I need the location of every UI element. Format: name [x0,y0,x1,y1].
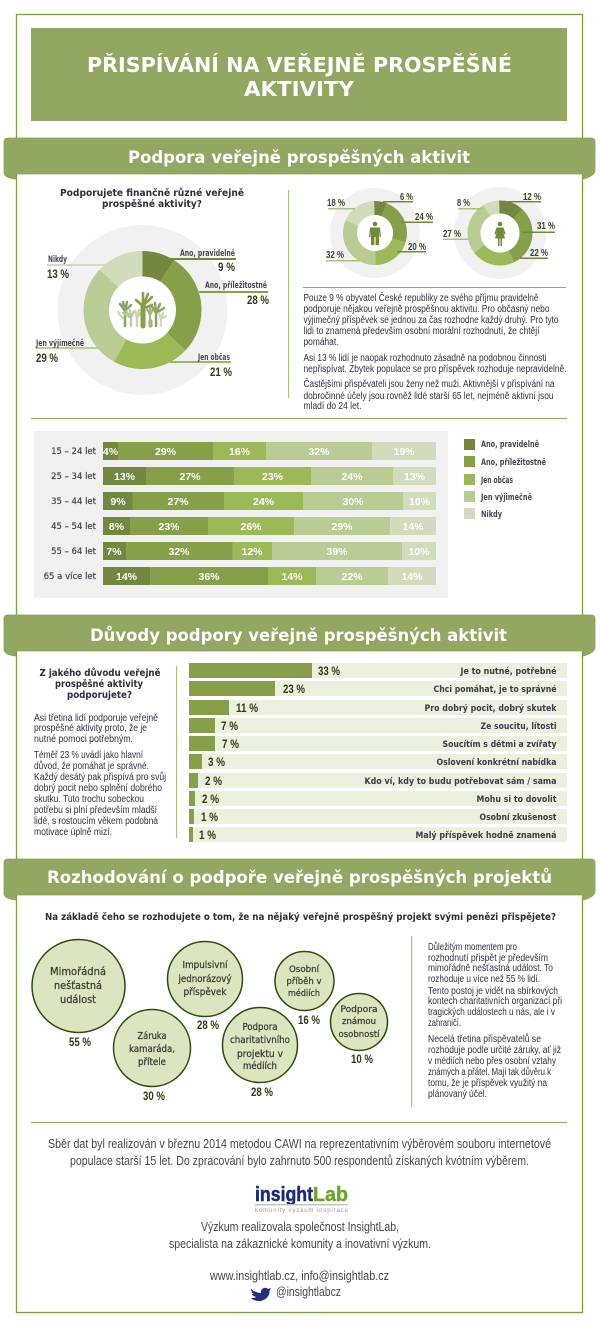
bar chart: reasons: Osobní zkušenost [480,812,557,823]
row 25-34: 25 – 34 let [51,472,97,482]
row 25-34: 24% [341,471,363,483]
footer: company [169,1220,431,1251]
callout: Ano, pravidelně [170,248,236,274]
question: decision: Na základě čeho se rozhodujete o tom, že na nějaký veřejně prospěšný projekt svými penězi přispějete? [45,912,556,923]
labels: women: 22 % [530,247,548,259]
row 65+: 14% [401,571,423,583]
row 25-34: 23% [262,471,284,483]
bubble: Záruka kamaráda, přítele: Záruka [138,1031,166,1042]
bar chart: reasons: Mohu si to dovolit [476,795,557,805]
bar chart: reasons: 2 % [205,774,222,788]
bubble: Podpora charitativního projektu v médiích: charitativního [230,1035,290,1046]
footer: methodology: populace starší 15 let. Do zpracování bylo zahrnuto 500 respondentů získaných kvótním výběrem. [70,1154,529,1168]
footer: company: Výzkum realizovala společnost InsightLab, [201,1220,399,1234]
text block: reasons: důvod, že pomáhat je správné. [34,760,149,772]
row 25-34: 13% [404,471,426,483]
text block: reasons: prospěšné aktivity proto, že je [34,723,147,734]
callout: Jen výjimečně [35,338,98,365]
text block: decision [428,941,562,1100]
row 55-64 [51,542,436,560]
text block: decision: mimořádně nešťastná událost. To [428,963,553,974]
section band: Podpora: Podpora veřejně prospěšných aktivit [128,148,470,168]
bubble: Podpora známou osobností: Podpora [340,1005,378,1015]
text block: support summary [304,291,566,412]
bubble: Podpora známou osobností: osobností [338,1030,380,1040]
bubble: Impulsivní jednorázový příspěvek: 28 % [197,1018,219,1032]
row 45-54: 45 – 54 let [51,522,97,532]
text block: reasons: Asi třetina lidí podporuje veřejně [34,713,158,724]
row 35-44 [51,492,436,510]
bubble: Osobní příběh v médiích: médiích [288,988,320,999]
row 45-54 [51,517,436,535]
text block: support summary: mladí do 24 let. [304,401,362,412]
callout: Ano, pravidelně: 9 % [218,260,235,274]
bar chart: reasons: Oslovení konkrétní nabídka [436,757,556,768]
row 35-44: 27% [167,496,189,508]
question: support: Podporujete finančně různé veřejně [60,188,244,199]
bubble: Osobní příběh v médiích [275,952,334,1027]
legend: Jen občas [480,475,513,486]
bar chart: reasons: Pro dobrý pocit, dobrý skutek [424,704,557,714]
callout: Jen občas: 21 % [210,365,232,379]
text block: reasons: potřebu si plní především mladší [34,805,157,816]
row 55-64: 39% [326,546,348,558]
text block: decision: tomu, že je příspěvek využitý na [428,1078,547,1089]
bar chart: reasons: 7 % [222,737,239,751]
bubble: Impulsivní jednorázový příspěvek: příspěvek [184,987,227,998]
callout: Nikdy: Nikdy [48,255,67,265]
text block: reasons: motivace úplně mizí. [34,827,112,838]
bar chart: reasons: Malý příspěvek hodně znamená [416,830,556,841]
text block: support summary: podporuje nějakou veřejně prospěšnou aktivitu. Pro občasný nebo [304,304,550,315]
row 35-44: 24% [253,496,275,508]
divider lines [31,190,567,419]
logo: insightLab: insight [255,1184,313,1206]
question: support [60,188,244,210]
bar chart: reasons: 23 % [283,682,305,696]
bubble: Impulsivní jednorázový příspěvek: Impulsivní [182,960,228,971]
footer: contact: @insightlabcz [276,1285,341,1299]
text block: decision: Tento postoj je vidět na sbírkových [428,986,558,997]
labels: men: 20 % [408,241,426,253]
labels: women: 8 % [457,197,470,209]
bar chart: reasons: 7 % [221,719,238,733]
text block: support summary: Častějšími přispěvateli jsou ženy než muži. Aktivnější v přispívání na [304,377,555,390]
row 45-54: 26% [240,521,262,533]
logo: insightLab [255,1184,349,1214]
row 25-34: 27% [179,471,201,483]
text block: support summary: Asi 13 % lidí je naopak rozhodnuto zásadně na podobnou činnosti [304,353,546,364]
row 65+: 14% [281,571,303,583]
callout: Jen výjimečně: Jen výjimečně [35,338,84,349]
bar chart: reasons: 1 % [199,828,216,842]
bubble: Osobní příběh v médiích: příběh v [286,977,322,987]
section band: Podpora [4,138,595,179]
text block: decision: tragických událostech u nás, ale i v [428,1007,555,1018]
section band: Rozhodování: Rozhodování o podpoře veřejně prospěšných projektů [47,866,552,888]
bubble: Podpora známou osobností: známou [342,1017,376,1027]
logo: insightLab: Lab [313,1184,348,1206]
text block: support summary: pomáhat. [304,337,338,348]
row 35-44: 30% [342,496,364,508]
logo: insightLab: komunity výzkum inspirace [255,1208,349,1214]
callout: Ano, příležitostně: Ano, příležitostně [205,280,267,291]
text block: decision: Důležitým momentem pro [428,941,517,953]
question: reasons: prospěšné aktivity [55,679,144,690]
row 65+: 36% [198,571,220,583]
divider line [31,1122,567,1123]
row 15-24: 29% [155,446,177,458]
text block: decision: rozhodnutí přispět je především [428,953,548,964]
bar chart: reasons: Je to nutné, potřebné [460,666,556,677]
text block: decision: Necelá třetina přispěvatelů se [428,1033,541,1045]
footer: company: specialista na zákaznické komunity a inovativní výzkum. [169,1237,431,1251]
bar chart: reasons: 2 % [202,792,219,806]
legend: Ano, pravidelně [481,439,539,450]
row 45-54: 14% [402,521,424,533]
bubble: Osobní příběh v médiích: 16 % [298,1013,320,1027]
bar chart: reasons: 3 % [208,755,225,769]
bubble: Impulsivní jednorázový příspěvek: jednorázový [178,974,232,985]
row 35-44: 35 – 44 let [51,497,97,507]
callout: Nikdy: 13 % [47,267,69,281]
callout: Nikdy [47,255,105,281]
divider line [176,666,177,838]
title banner [31,28,567,121]
question: support: prospěšné aktivity? [102,199,202,210]
labels: women: 31 % [537,220,555,232]
text block: reasons: lidé, s rostoucím věkem podobná [34,816,158,827]
row 65+: 14% [116,571,138,583]
row 15-24: 19% [393,446,415,458]
section band: Důvody: Důvody podpory veřejně prospěšných aktivit [90,624,507,646]
bubble: Mimořádná nešťastná událost: událost [60,994,96,1006]
title banner: PŘISPÍVÁNÍ NA VEŘEJNĚ PROSPĚŠNÉ [87,53,512,77]
row 65+: 65 a více let [44,572,97,582]
row 45-54: 8% [109,521,125,533]
bubble: Podpora charitativního projektu v médiích [222,1008,298,1099]
row 45-54: 23% [158,521,180,533]
icon: raised hands [118,293,166,326]
row 35-44: 9% [110,496,126,508]
bubble: Impulsivní jednorázový příspěvek [168,942,242,1032]
legend: Nikdy [481,510,502,520]
bubble: Záruka kamaráda, přítele: kamaráda, [129,1044,175,1055]
question: reasons [40,668,160,701]
bubble: Záruka kamaráda, přítele [114,1010,190,1103]
callout: Jen výjimečně: 29 % [36,351,58,365]
bubble: Mimořádná nešťastná událost [32,940,125,1049]
callout: Jen občas: Jen občas [197,352,230,363]
text block: decision: v médiích nebo přes osobní vztahy [428,1056,556,1067]
labels: men: 24 % [415,211,433,223]
donut chart: overall support [35,225,269,395]
row 15-24: 15 – 24 let [51,447,97,457]
text block: reasons: nutné pomoci potřebným. [34,734,133,745]
legend [464,439,546,520]
bar chart: reasons: Kdo ví, kdy to budu potřebovat sám / sama [364,777,556,787]
icon: woman [494,222,506,246]
row 55-64: 32% [168,546,190,558]
row 55-64: 12% [241,546,263,558]
bubble: Záruka kamaráda, přítele: 30 % [143,1089,165,1103]
bar chart: reasons [189,663,567,842]
text block: decision: známých a přátel. Mají tak důvěru k [428,1066,552,1078]
text block: decision: rozhoduje podle určité záruky, ať již [428,1045,561,1056]
bar chart: reasons: 1 % [201,810,218,824]
text block: support summary: Pouze 9 % obyvatel České republiky ze svého příjmu pravidelně [304,291,539,304]
bubble: Záruka kamaráda, přítele: přítele [138,1057,166,1068]
row 15-24: 4% [103,446,119,458]
question: reasons: Z jakého důvodu veřejně [40,668,160,679]
text block: decision: zahraničí. [428,1018,461,1029]
labels: men [326,191,433,262]
panel: stacked bar chart by age [34,431,448,598]
bar chart: reasons: 33 % [318,664,340,678]
text block: support summary: lidi to znamená především osobní morální rozhodnutí, že chtějí [304,326,540,337]
row 55-64: 55 – 64 let [51,547,97,557]
row 15-24: 16% [229,446,251,458]
bar chart: reasons: Ze soucitu, lítosti [480,722,556,732]
divider line [411,936,412,1107]
labels: women: 12 % [523,191,541,203]
title banner: AKTIVITY [244,77,355,101]
bar chart: reasons: 11 % [236,701,258,715]
row 15-24: 32% [308,446,330,458]
labels: women [443,191,555,259]
bubble: Podpora charitativního projektu v médiích: projektu v [237,1049,283,1060]
text block: reasons: Téměř 23 % uvádí jako hlavní [34,750,143,761]
labels: men: 32 % [326,249,344,261]
row 25-34 [51,467,436,485]
text block: reasons: dobrý pocit nebo splnění dobrého [34,783,162,794]
question: reasons: podporujete? [67,690,132,701]
callout: Ano, pravidelně: Ano, pravidelně [180,248,235,259]
section band: Rozhodování [4,859,595,900]
text block: decision: plánovaný účel. [428,1089,487,1100]
text block: reasons [34,713,166,838]
bubble: Osobní příběh v médiích: Osobní [289,965,320,975]
bubble: Podpora charitativního projektu v médiích: Podpora [242,1022,278,1033]
row 25-34: 13% [114,471,136,483]
text block: decision: rozhoduje u více než 55 % lidí. [428,974,540,985]
text block: reasons: skutku. Tuto trochu sobeckou [34,794,144,805]
icon: man [369,222,381,245]
legend: Jen výjimečně [480,492,532,503]
bar chart: reasons: Soucítím s dětmi a zvířaty [442,739,557,750]
text block: decision: kontech charitativních organizací při [428,996,562,1007]
labels: women: 27 % [443,228,461,240]
row 15-24 [51,442,436,460]
row 45-54: 29% [331,521,353,533]
bubble: Podpora charitativního projektu v médiích: médiích [243,1061,277,1072]
icon: twitter bird [251,1288,271,1301]
bubble: Mimořádná nešťastná událost: Mimořádná [50,966,106,978]
text block: reasons: Každý desátý pak přispívá pro svůj [34,771,166,783]
row 55-64: 7% [106,546,122,558]
section band: Důvody [4,615,595,656]
footer: methodology [48,1137,551,1168]
row 65+ [44,567,436,585]
row 65+: 22% [341,571,363,583]
bar chart: reasons: Chci pomáhat, je to správné [434,684,556,695]
callout: Ano, příležitostně: 28 % [247,293,269,307]
bubble: Podpora známou osobností: 10 % [351,1052,373,1066]
footer: contact [209,1269,389,1299]
row 55-64: 10% [408,546,430,558]
bubble: Podpora charitativního projektu v médiích: 28 % [251,1085,273,1099]
legend: Ano, příležitostně [481,457,546,468]
bubble: Podpora známou osobností [330,994,388,1066]
bubble chart: decision factors [32,940,388,1103]
labels: men: 18 % [327,197,345,209]
row 35-44: 10% [409,496,431,508]
text block: support summary: dobročinné účely jsou rovněž lidé starší 65 let, nejméně aktivní jsou [304,391,554,402]
labels: men: 6 % [400,191,413,203]
callout: Jen občas [170,352,232,379]
bubble: Mimořádná nešťastná událost: nešťastná [54,980,102,992]
donut chart: women [443,187,555,279]
footer: contact: www.insightlab.cz, info@insightlab.cz [209,1269,389,1283]
donut chart: men [326,188,433,278]
bubble: Mimořádná nešťastná událost: 55 % [69,1035,91,1049]
callout: Ano, příležitostně [199,280,269,307]
